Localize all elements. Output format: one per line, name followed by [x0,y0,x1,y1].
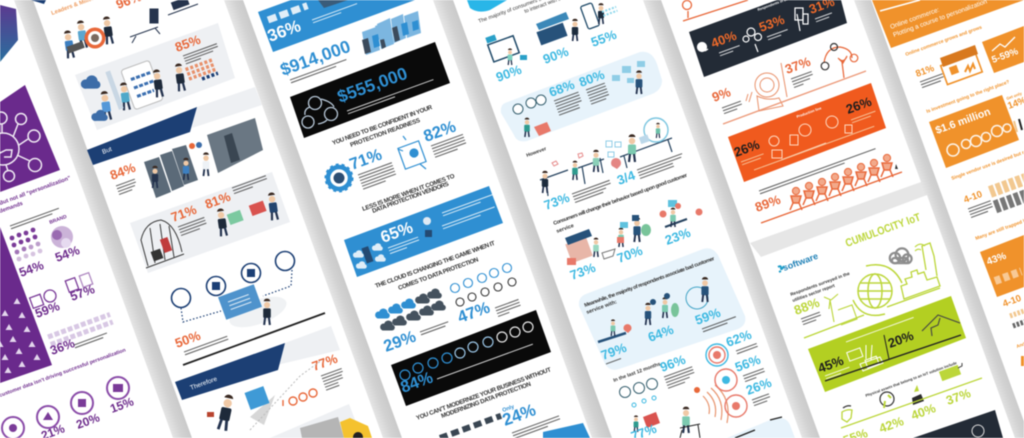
panel: black 84% band [391,310,551,406]
stat: $1.6 million: $1.6 million [934,106,992,137]
icon: gear [326,164,352,192]
stat: 26%: 26% [744,375,774,398]
stat: 62%: 62% [724,327,754,350]
stat: 4-10: 4-10 [962,189,984,206]
illustration: clock with man [686,287,708,309]
illustration: agent desk [606,118,672,169]
panel: dark block [689,0,847,77]
heading: consumers will change: Consumers will change their behavior based upon good customer [553,173,688,227]
ground line [183,313,325,365]
heading: customer data: customer data isn’t driving successful personalization [0,347,127,399]
stat: 53%: 53% [757,12,787,35]
illustration: truck band [270,404,372,438]
chart: people rows [1010,309,1024,326]
illustration: woman with red bag [634,412,660,432]
body lines [572,180,613,202]
icon: storefront [536,12,578,45]
heading: cloud: THE CLOUD IS CHANGING THE GAME WHEN IT [374,240,496,290]
illustration: desks with people [540,150,604,196]
stat: 40%: 40% [709,28,739,51]
icons: orange alert row [283,389,317,406]
icon: cloud and wifi [890,244,925,263]
panel: orange block [728,83,886,182]
hexagon cut-off graphic [0,5,18,62]
heading: grows: Online commerce grows and grows [905,24,983,58]
caption lines [759,149,877,194]
illustration: people and plant [617,215,651,247]
icon: shopper hub [0,112,42,182]
icon: house outline [922,315,960,336]
heading: modernize: YOU CAN’T MODERNIZE YOUR BUSINESS WITHOUT [415,366,552,422]
stat: 23%: 23% [663,225,693,248]
illustration: team with target [63,16,114,59]
icon: puzzle pieces and businessmen [227,210,244,225]
stat: 90%: 90% [541,44,571,67]
heading: physical: Physical assets that belong to an IoT solution include [865,361,957,398]
panel: pale pill 68/80 [501,52,662,141]
stat: 84%: 84% [398,368,436,397]
cyan pill [467,0,507,12]
top banner stub [31,0,46,4]
illustration: desk with icons [660,200,702,227]
stat: 56%: 56% [733,352,763,375]
stat: 96%: 96% [658,352,688,375]
illustration: person with floating tiles [636,70,642,94]
icon: cycle [302,96,338,128]
stat: 88%: 88% [792,295,822,318]
body lines [801,312,822,325]
icon: arc with wrenches [821,44,858,78]
chart: dot grid [10,228,42,261]
icons: clouds left [375,289,446,331]
icons: vendor badges [423,217,431,225]
body lines [184,336,228,355]
banner: But: But [101,146,113,156]
stat: 81%: 81% [914,63,936,80]
pale pill bottom [727,418,795,438]
orange line [723,71,866,124]
stat: 36%: 36% [48,336,77,358]
stat: 80%: 80% [577,67,607,90]
illustration: shop with cart [565,229,615,265]
panel: 43% block [980,235,1024,297]
heading: consumers will change: service [556,223,575,235]
green line [841,378,982,428]
stat: 36%: 36% [265,16,303,46]
purple shopper panel [0,85,60,192]
stat: 26%: 26% [844,94,874,117]
body lines [388,237,420,254]
icon: phone [580,3,617,29]
stat: 73%: 73% [542,190,572,213]
green line right [887,288,940,307]
illustration: frustrated worker [598,333,626,342]
illustration: bottom desk [735,417,782,438]
logo mark [778,266,784,272]
heading: meanwhile: Meanwhile, the majority of respondents associate bad customer [584,256,715,309]
icons: clouds with locks [450,264,516,306]
panel: black $555,000 block [290,42,450,138]
panel: lime block [808,296,966,392]
stat: 70%: 70% [615,243,645,266]
heading: cloud: COMES TO DATA PROTECTION [397,256,480,292]
body lines [431,134,467,157]
stat: 20%: 20% [74,410,102,432]
icon: globe [853,265,902,315]
stat: 89%: 89% [753,192,783,215]
stat: 47%: 47% [455,298,493,327]
panel: $1.6 million [929,95,1019,168]
stat: 15%: 15% [108,394,136,416]
body lines [442,194,496,216]
orange line [761,172,902,223]
stat: 65%: 65% [378,218,416,247]
body lines [312,4,358,23]
stat: 43%: 43% [985,251,1008,268]
body lines [968,201,994,217]
body lines [736,343,758,354]
stat: 77%: 77% [310,351,340,374]
illustration: people queue [645,303,651,325]
stat: 40%: 40% [909,401,938,423]
illustration: outline divider [781,63,787,97]
heading: less is more: DATA PROTECTION VENDORS [371,181,450,215]
heading: confident: YOU NEED TO BE CONFIDENT IN YOUR [331,104,434,147]
stat: 84%: 84% [108,160,138,183]
icon: brand head [51,226,73,248]
body lines [183,44,220,64]
icons: triangles [0,298,40,373]
icons: row above line [842,363,962,422]
body lines [702,317,737,332]
stat: 4-10: 4-10 [1001,293,1023,310]
body lines [741,154,765,165]
icons: calendar and search [30,290,56,308]
illustration: woman with bag [534,122,551,136]
heading: but not all personalization: But not all “personalization” [0,175,72,207]
stat: 71%: 71% [347,145,385,174]
body lines [554,92,584,115]
stat: 9%: 9% [710,84,733,105]
stat: 55%: 55% [589,27,619,50]
illustration: server racks [144,118,263,198]
divider [884,335,889,359]
panel: grey band with 71% and 81% [130,172,290,273]
stat: 64%: 64% [646,322,676,345]
stat: 5-59%: 5-59% [990,46,1020,66]
body lines [722,101,743,114]
panel: blue 65% block [344,186,503,277]
icons: clipboards [65,273,93,292]
panel: grey band with 85% [75,23,235,130]
body lines [586,83,610,104]
stat: 3/4: 3/4 [615,167,638,188]
label [846,317,914,342]
illustration: runner and paper plane [207,360,322,431]
stat: 54%: 54% [53,243,82,265]
stat: 37%: 37% [783,54,813,77]
heading: modernize: MODERNIZING DATA PROTECTION [440,381,532,420]
stat: 59%: 59% [693,305,723,328]
body lines [920,74,945,88]
sheet A: purple personalization infographic [0,5,136,438]
panel: growth block [982,26,1024,73]
body lines [178,217,207,235]
panel: bottom dark block [913,410,1003,438]
body lines [825,367,850,379]
body lines [495,299,522,316]
stat: 71%: 71% [169,202,199,225]
stat: 26%: 26% [732,137,762,160]
sheet C: data protection [258,0,590,438]
chart: bars [1014,119,1022,132]
icons: white boxes [268,6,307,20]
text: respondents: Respondents surveyed in the [790,271,851,297]
text: online commerce: Online commerce: [889,6,941,31]
icons: outlined boxes [995,271,1021,281]
green line [804,315,864,338]
label: however: However [526,146,547,159]
body lines [347,80,434,114]
icon: cage [141,220,184,268]
icon: machine outline [847,345,883,371]
text: respondents: utilities sector report [792,283,836,303]
circle icons row [2,377,129,438]
sheet D: customer service [467,0,795,438]
panel: top banner [872,0,1024,48]
stat: 37%: 37% [944,386,973,408]
label: Only: Only [502,404,516,414]
icons: clouds [400,322,533,380]
stat: 79%: 79% [599,340,629,363]
icon: factory [901,243,940,299]
sheet B: leaders and blockers [31,0,372,438]
body lines [791,71,815,87]
body lines [664,367,696,388]
illustration: team around phone [121,60,163,110]
icons: gears [947,124,1011,156]
illustration: outline head [746,73,783,111]
banner: Therefore [175,326,340,400]
sheet G: orange online commerce [872,0,1024,366]
chart: vendor bars [990,178,1024,207]
diagram: cloud storage with circles [172,252,294,334]
stat: 50%: 50% [173,328,203,351]
chart: squares grid [186,60,215,79]
icons: outline circles [620,378,658,407]
icon: server with clouds [353,243,386,269]
stat: 24%: 24% [500,400,538,430]
icon: monitor [485,34,527,65]
dark line [825,335,961,381]
body lines [743,368,766,382]
stat: 73%: 73% [568,260,598,283]
illustration: blue city [362,11,421,55]
sheet E: orange and dark manufacturing [682,0,902,223]
body lines [719,45,741,56]
icons: three ring badges [706,344,747,417]
panel: pale pill bad service [579,248,745,370]
text: service with: service with: [586,299,618,316]
body lines [420,322,449,335]
stat: 82%: 82% [421,117,459,146]
stat: $555,000: $555,000 [335,63,410,107]
body lines [321,368,347,390]
body lines [637,154,685,178]
top orange icon and line [682,0,748,21]
icon: storefront [940,45,982,85]
sheet F: Cumulocity IoT [778,211,1003,438]
panel: blue 36% block [258,0,415,52]
illustration: outline machines [769,116,852,160]
banner: Therefore: Therefore [189,376,219,392]
icon: wind turbine and panel [824,294,857,325]
icons: dark chain row [440,416,501,438]
stat: 57%: 57% [68,282,97,304]
label: get only: Get only [1006,91,1023,101]
banner: But [87,87,262,165]
illustration: row of figures [790,154,898,210]
brand label: BRAND [49,214,68,226]
stat: 45%: 45% [816,353,846,376]
body lines [358,163,397,189]
stat: 85%: 85% [173,32,203,55]
body lines [752,394,771,406]
logo: software: software [781,251,820,273]
stat: 54%: 54% [17,258,46,280]
text bars under heading [10,208,60,229]
orange box [1021,356,1024,366]
label: in the last 12 months: In the last 12 months [613,361,662,384]
body lines [232,176,268,194]
stat: 20%: 20% [886,328,916,351]
body lines [116,179,138,194]
body lines [290,59,347,83]
stat: 59%: 59% [33,299,62,321]
heading: confident: PROTECTION READINESS [349,117,421,149]
heading: investment: Is investment going to the right place? [926,79,1010,115]
icons: pale row [48,314,113,345]
illustration: desk worker [130,0,198,43]
stat: $914,000: $914,000 [278,36,353,80]
icon: head and gears [698,8,808,52]
illustration: megaphone with sound waves [680,385,728,438]
stat: 29%: 29% [381,327,419,356]
stat: 81%: 81% [203,189,233,212]
heading: less is more: LESS IS MORE WHEN IT COMES TO [361,173,456,213]
body lines [512,416,561,438]
stat: 90%: 90% [494,62,524,85]
icons: outline circles [513,95,546,114]
body lines [437,344,533,379]
title: CUMULOCITY IoT [844,211,922,250]
blue corner block [543,423,590,438]
stat: 42%: 42% [877,414,906,436]
icon: lock circuit [398,136,426,169]
stat: 68%: 68% [547,77,577,100]
label: Production line [796,106,822,119]
purple triangles panel [0,227,52,383]
